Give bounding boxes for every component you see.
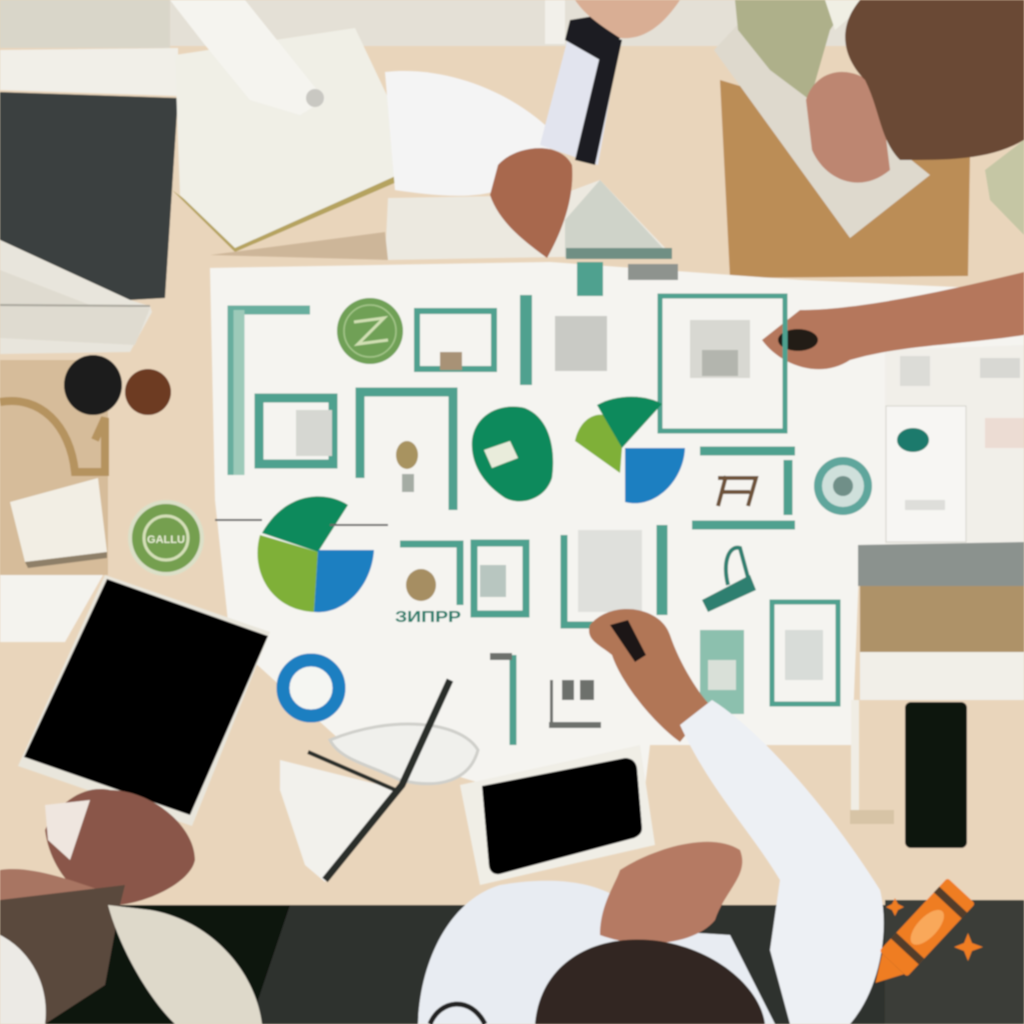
green seal <box>337 298 403 364</box>
arm and hand: right <box>762 272 1024 369</box>
green seal: left: GALLU <box>147 534 185 546</box>
large chart sheet <box>210 262 1024 830</box>
tablet paper under the hand <box>210 180 672 260</box>
blue ring <box>283 660 339 716</box>
small panels in lower charts <box>406 530 823 714</box>
brown scribble icon <box>718 476 756 506</box>
logo: crayon with sparkles <box>862 878 983 996</box>
bar marks <box>490 653 601 728</box>
hand holding marker <box>589 609 710 742</box>
notepad on desk left <box>10 478 107 568</box>
white notebook <box>170 0 420 252</box>
pie chart: lower <box>215 496 388 612</box>
tile inside middle frame <box>296 410 332 456</box>
laptop: top left <box>0 48 178 354</box>
middle chart frames <box>259 392 795 525</box>
lower chart frames <box>400 525 838 745</box>
right machine block <box>850 542 1024 848</box>
tablet: black, large <box>0 575 270 826</box>
pie chart: upper <box>575 397 685 503</box>
teal round badge <box>814 457 872 515</box>
top chart frames <box>232 262 785 475</box>
person: bottom centre with white shirt <box>418 700 884 1024</box>
person: bottom left <box>0 789 262 1024</box>
white papers and glasses <box>280 680 478 882</box>
small tan drop <box>396 441 418 492</box>
garbled label: ЗИПРР <box>395 609 461 626</box>
person: white sleeve and hand at top centre <box>385 0 680 258</box>
person: top right with long hair <box>714 0 1024 278</box>
mug and cup <box>0 355 171 472</box>
green balloon chart <box>472 407 553 501</box>
small grey tiles <box>440 264 750 378</box>
green seal: left <box>128 500 204 576</box>
green stamp <box>702 548 756 612</box>
tablet: small <box>460 745 655 885</box>
